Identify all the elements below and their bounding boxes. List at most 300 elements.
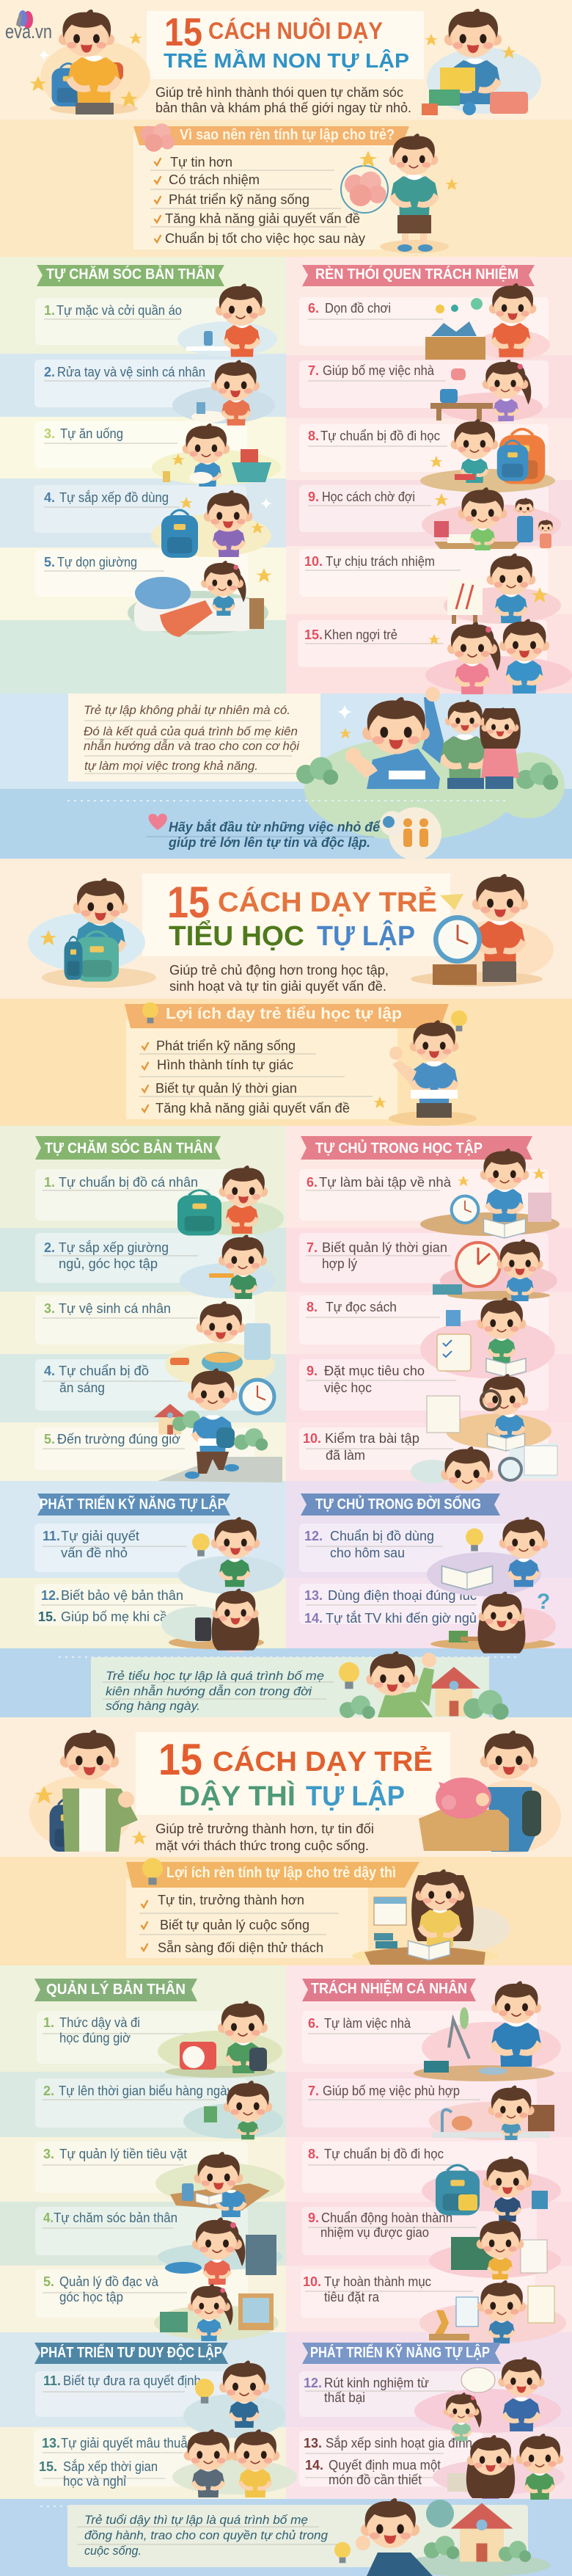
title card bbox=[147, 11, 424, 79]
item 13 and 14: 13. bbox=[304, 1588, 323, 1603]
kid: walking bbox=[154, 1369, 282, 1482]
item 11: vấn đề nhỏ bbox=[61, 1546, 128, 1560]
ribbon: self-care: TỰ CHĂM SÓC BẢN THÂN bbox=[46, 265, 215, 283]
title line 1: CÁCH DẠY TRẺ bbox=[213, 1745, 433, 1778]
item 10: đã làm bbox=[326, 1448, 365, 1463]
title card bbox=[142, 873, 450, 956]
italic message: Trẻ tuổi dậy thì tự lập là quá trình bố mẹ bbox=[84, 2513, 308, 2527]
kid: school bag bbox=[177, 1165, 284, 1236]
kid: packing backpack bbox=[422, 2156, 561, 2222]
kid: eating bbox=[152, 423, 281, 487]
panel: message card 1 bbox=[68, 687, 565, 840]
item 10: tiêu đặt ra bbox=[324, 2290, 380, 2304]
title line 1: 15 bbox=[167, 878, 210, 927]
item 2: Tự lên thời gian biểu hàng ngày bbox=[59, 2084, 233, 2098]
item 3: 3. bbox=[44, 1301, 55, 1316]
ribbon: PHÁT TRIỂN KỸ NĂNG TỰ LẬP bbox=[310, 2343, 490, 2361]
item 13 and 14: 14. bbox=[304, 1611, 323, 1626]
item 8 bbox=[302, 2142, 537, 2193]
callout text bbox=[147, 819, 381, 850]
panel: benefits primary bbox=[125, 1003, 477, 1126]
ribbon bbox=[302, 2343, 501, 2364]
ribbon heading: Vì sao nên rèn tính tự lập cho trẻ? bbox=[180, 127, 395, 143]
item 3: Tự ăn uống bbox=[60, 426, 123, 441]
kid: thinking bbox=[183, 2361, 286, 2438]
panel: life skills primary bbox=[34, 1493, 284, 1652]
item 9: 9. bbox=[308, 2211, 319, 2225]
item 1 bbox=[35, 1169, 255, 1220]
title line 2: TỰ LẬP bbox=[317, 920, 415, 952]
kid: schedule bbox=[183, 2081, 283, 2139]
item 13 and 15: học và nghỉ bbox=[63, 2474, 126, 2489]
item 13 and 14: Quyết định mua một bbox=[329, 2458, 441, 2473]
item 7 bbox=[299, 1233, 549, 1283]
item 6 bbox=[299, 1169, 549, 1220]
item 12 and 15: 12. bbox=[41, 1588, 59, 1603]
kid: toy box bbox=[425, 283, 550, 360]
icon: heart bbox=[148, 814, 167, 830]
item 5: Tự dọn giường bbox=[57, 555, 137, 570]
kid: blackboard bbox=[429, 2219, 561, 2280]
item 3: Tự vệ sinh cá nhân bbox=[59, 1301, 171, 1316]
kid: backpack bbox=[28, 878, 156, 988]
item 4: 4.Tự chăm sóc bản thân bbox=[43, 2211, 177, 2225]
ribbon bbox=[34, 2343, 228, 2364]
item 9: 9. bbox=[308, 490, 319, 504]
kid: teen with backpack bbox=[29, 1730, 147, 1852]
item 8 bbox=[299, 424, 549, 472]
item 6: Dọn đồ chơi bbox=[325, 301, 391, 316]
panel: why build independence bbox=[133, 123, 458, 253]
subtitle bbox=[155, 1822, 374, 1853]
subtitle: mặt với thách thức trong cuộc sống. bbox=[155, 1838, 369, 1853]
kid: praising bbox=[425, 619, 572, 694]
item 7: Biết quản lý thời gian bbox=[322, 1240, 447, 1255]
kid with house bbox=[339, 1651, 509, 1720]
item 12: 12. bbox=[304, 1529, 323, 1543]
item 7 bbox=[302, 2078, 537, 2128]
panel: life skills teen bbox=[299, 2343, 565, 2500]
callout text: Hãy bắt đầu từ những việc nhỏ để bbox=[169, 819, 381, 834]
item 4: 4. bbox=[44, 490, 55, 505]
checklist: Chuẩn bị tốt cho việc học sau này bbox=[165, 231, 365, 246]
item 3: 3. bbox=[44, 426, 55, 441]
item 15 bbox=[298, 620, 547, 667]
item 1: 1. bbox=[44, 1175, 55, 1190]
item 12: 12. bbox=[304, 2376, 322, 2390]
panel: benefits teen bbox=[126, 1858, 510, 1965]
kid: magnifier bbox=[427, 1374, 551, 1451]
kid: washing bbox=[177, 284, 277, 357]
item 4 bbox=[34, 485, 246, 533]
item 10 bbox=[299, 549, 549, 597]
italic message: nhẫn hướng dẫn và trao cho con cơ hội bbox=[84, 739, 300, 753]
item 4: ăn sáng bbox=[59, 1380, 105, 1395]
item 10 bbox=[301, 2269, 535, 2318]
subtitle bbox=[155, 85, 411, 115]
item 8: Tự chuẩn bị đồ đi học bbox=[324, 2147, 444, 2161]
item 12: Rút kinh nghiệm từ bbox=[324, 2376, 429, 2390]
item 5: góc học tập bbox=[59, 2290, 123, 2304]
item 2: ngủ, góc học tập bbox=[59, 1256, 158, 1271]
kid: school bag bbox=[420, 419, 555, 492]
item 12 bbox=[299, 1524, 512, 1572]
italic message: cuộc sống. bbox=[84, 2544, 142, 2558]
item 12: cho hôm sau bbox=[330, 1546, 405, 1560]
item 2 bbox=[34, 360, 247, 407]
item 7 bbox=[299, 360, 549, 408]
item 1 bbox=[37, 2011, 249, 2064]
item 5 bbox=[34, 1427, 254, 1470]
item 11 bbox=[35, 2371, 248, 2417]
item 2: 2. bbox=[44, 365, 55, 379]
ribbon: TỰ CHỦ TRONG ĐỜI SỐNG bbox=[315, 1495, 481, 1513]
title line 2: DẬY THÌ bbox=[179, 1780, 296, 1812]
item 10: Tự hoàn thành mục bbox=[324, 2274, 431, 2289]
item 8: Tự đọc sách bbox=[326, 1300, 397, 1314]
item 12 and 15 bbox=[34, 1584, 225, 1626]
kid: packing backpack bbox=[151, 490, 272, 558]
kids: two talking bbox=[172, 2429, 297, 2497]
item 8 bbox=[299, 1295, 549, 1345]
item 8: 8. bbox=[307, 1300, 318, 1314]
panel: study autonomy bbox=[299, 1136, 560, 1491]
title line 1: CÁCH DẠY TRẺ bbox=[218, 886, 437, 918]
item 6: 6. bbox=[307, 1175, 318, 1190]
kid with house and speech bubble bbox=[334, 2498, 550, 2576]
item 10: 10. bbox=[304, 554, 323, 569]
title line 2: TIỂU HỌC bbox=[169, 919, 304, 952]
item 6: 6. bbox=[308, 2016, 319, 2031]
subtitle: bản thân và khám phá thế giới ngay từ nhỏ. bbox=[155, 101, 411, 115]
kid: reading bbox=[420, 1298, 555, 1378]
kid: girl with question mark: ? bbox=[537, 1590, 550, 1614]
kids: family talk bbox=[433, 2434, 565, 2500]
title line 1: 15 bbox=[164, 10, 202, 54]
item 10: 10. bbox=[303, 2274, 321, 2289]
ribbon bbox=[35, 1136, 221, 1160]
checklist: Tự tin hơn bbox=[170, 155, 232, 170]
item 13 and 15: Tự giải quyết mâu thuẫn bbox=[61, 2435, 194, 2451]
kid: fist raised bbox=[373, 1011, 477, 1126]
kid: girl with question mark bbox=[430, 1590, 556, 1653]
panel: independent thinking bbox=[34, 2343, 297, 2497]
subtitle: Giúp trẻ hình thành thói quen tự chăm sóc bbox=[155, 85, 403, 100]
kid: big clock bbox=[433, 1240, 557, 1301]
italic message: sống hàng ngày. bbox=[106, 1699, 200, 1713]
item 13 and 14: Sắp xếp sinh hoạt gia đình bbox=[326, 2435, 472, 2451]
kid: girl with frame bbox=[154, 2284, 279, 2341]
item 7: 7. bbox=[308, 2084, 319, 2098]
kid: making bed bbox=[128, 561, 272, 637]
kid: toothbrush bbox=[180, 1234, 275, 1299]
item 12: Chuẩn bị đồ dùng bbox=[330, 1529, 434, 1543]
kid: checking homework bbox=[411, 1442, 557, 1491]
item 1: Thức dậy và đi bbox=[59, 2015, 140, 2030]
kid: boy tidying toys bbox=[422, 9, 541, 115]
item 9: việc học bbox=[324, 1380, 372, 1395]
item 1: học đúng giờ bbox=[59, 2031, 131, 2045]
ribbon: TỰ CHĂM SÓC BẢN THÂN bbox=[45, 1139, 213, 1157]
item 10: 10. bbox=[303, 1431, 321, 1446]
item 15: Khen ngợi trẻ bbox=[324, 627, 397, 642]
checklist: Tăng khả năng giải quyết vấn đề bbox=[165, 211, 360, 226]
ribbon heading: Lợi ích rèn tính tự lập cho trẻ dậy thì bbox=[166, 1865, 396, 1881]
checklist: Hình thành tính tự giác bbox=[157, 1058, 293, 1072]
item 4: 4. bbox=[44, 1364, 55, 1378]
ribbon bbox=[302, 1979, 476, 2001]
item 7: 7. bbox=[308, 363, 319, 378]
panel: self-care (preschool) bbox=[34, 265, 281, 637]
title line 1: 15 bbox=[158, 1735, 202, 1784]
title line 2 bbox=[169, 919, 415, 952]
item 5: 5. bbox=[43, 2274, 54, 2289]
checklist: Biết tự quản lý thời gian bbox=[155, 1081, 297, 1096]
checklist: Phát triển kỹ năng sống bbox=[156, 1038, 296, 1053]
item 13 and 15: 13. bbox=[42, 2436, 60, 2451]
item 12 and 15: Biết bảo vệ bản thân bbox=[61, 1588, 183, 1603]
item 5: Quản lý đồ đạc và bbox=[59, 2274, 159, 2289]
item 7: 7. bbox=[307, 1240, 318, 1255]
item 13 and 15: Sắp xếp thời gian bbox=[63, 2459, 158, 2474]
item 11: Tự giải quyết bbox=[61, 1529, 139, 1543]
kids: speech bubble conversation bbox=[414, 2357, 561, 2441]
item 9: nhiệm vụ được giao bbox=[320, 2225, 429, 2240]
item 6: Tự làm việc nhà bbox=[324, 2016, 411, 2031]
item 7: Giúp bố mẹ việc nhà bbox=[323, 363, 435, 378]
item 9: Đặt mục tiêu cho bbox=[324, 1364, 425, 1378]
checklist: Biết tự quản lý cuộc sống bbox=[160, 1918, 309, 1932]
item 12 and 15: 15. bbox=[38, 1609, 56, 1624]
section 1 header bbox=[29, 9, 541, 115]
ribbon bbox=[34, 1979, 197, 2001]
checklist: Phát triển kỹ năng sống bbox=[169, 192, 309, 207]
ribbon: QUẢN LÝ BẢN THÂN bbox=[46, 1980, 186, 1998]
logo: eva.vn bbox=[5, 10, 52, 43]
checklist bbox=[139, 1038, 373, 1116]
item 5 bbox=[35, 550, 248, 597]
item 7: hợp lý bbox=[322, 1256, 357, 1271]
ribbon: responsibility: RÈN THÓI QUEN TRÁCH NHIỆM bbox=[315, 265, 518, 283]
item 9 bbox=[299, 485, 549, 532]
italic message: Trẻ tiểu học tự lập là quá trình bố mẹ bbox=[106, 1669, 324, 1683]
item 12 and 15: Giúp bố mẹ khi cần bbox=[61, 1609, 175, 1624]
ribbon bbox=[301, 1493, 500, 1516]
item 13 and 14: món đồ cần thiết bbox=[329, 2473, 422, 2487]
item 6: 6. bbox=[308, 301, 319, 316]
item 3: 3. bbox=[43, 2147, 54, 2161]
item 12: thất bại bbox=[324, 2390, 365, 2405]
title card bbox=[136, 1732, 450, 1815]
item 1: 1. bbox=[44, 303, 55, 318]
panel: self management (teen) bbox=[34, 1979, 285, 2341]
item 3: Tự quản lý tiền tiêu vặt bbox=[59, 2147, 187, 2161]
italic message: kiên nhẫn hướng dẫn con trong đời bbox=[106, 1684, 312, 1698]
title line 1 bbox=[164, 10, 383, 54]
kid: alarm clock bbox=[158, 2001, 282, 2078]
ribbon: PHÁT TRIỂN KỸ NĂNG TỰ LẬP bbox=[40, 1495, 226, 1513]
ribbon heading: Lợi ích dạy trẻ tiểu học tự lập bbox=[166, 1005, 402, 1022]
ribbon bbox=[301, 1136, 532, 1160]
item 1: Tự mặc và cởi quần áo bbox=[56, 303, 182, 318]
title line 2: TỰ LẬP bbox=[306, 1780, 405, 1812]
kid: clock bbox=[411, 874, 554, 986]
section 3 header bbox=[29, 1730, 561, 1853]
kid: girl with books bbox=[158, 2218, 282, 2285]
item 8: Tự chuẩn bị đồ đi học bbox=[320, 429, 440, 443]
kid: boy with backpack bbox=[29, 10, 150, 114]
item 6: Tự làm bài tập về nhà bbox=[319, 1175, 452, 1190]
item 13 and 14 bbox=[299, 1584, 483, 1626]
item 11: 11. bbox=[43, 1529, 60, 1543]
item 4 bbox=[35, 1359, 255, 1411]
kid: painting bbox=[444, 553, 561, 624]
item 3 bbox=[35, 1295, 255, 1345]
item 4 bbox=[35, 2207, 248, 2255]
kid: girl studying bbox=[352, 1869, 510, 1965]
item 6 bbox=[302, 2011, 537, 2064]
item 1 bbox=[35, 298, 248, 345]
checklist: Tự tin, trưởng thành hơn bbox=[158, 1893, 304, 1907]
ribbon bbox=[37, 1493, 230, 1516]
item 2: Tự sắp xếp giường bbox=[59, 1240, 169, 1255]
logo: eva.vn: eva.vn bbox=[5, 21, 52, 43]
kid: helping parents bbox=[430, 360, 543, 422]
item 13 and 14 bbox=[299, 2431, 483, 2487]
panel: message card 2 bbox=[59, 1651, 516, 1720]
icon: children holding hands bbox=[380, 807, 441, 860]
item 13 and 15 bbox=[34, 2429, 224, 2489]
panel: responsibility (preschool) bbox=[298, 265, 572, 694]
item 11: Biết tự đưa ra quyết định bbox=[63, 2373, 201, 2388]
callout: start small bbox=[67, 801, 507, 860]
item 2: Rửa tay và vệ sinh cá nhân bbox=[57, 365, 205, 379]
kid: papers and hourglass bbox=[419, 2280, 566, 2343]
item 1: Tự chuẩn bị đồ cá nhân bbox=[59, 1175, 198, 1190]
panel: message card 3 bbox=[40, 2498, 550, 2576]
item 4: Tự sắp xếp đồ dùng bbox=[59, 490, 169, 505]
checklist: Tăng khả năng giải quyết vấn đề bbox=[155, 1101, 350, 1116]
item 4: Tự chuẩn bị đồ bbox=[59, 1364, 149, 1378]
italic message bbox=[77, 2513, 339, 2558]
kid: homework bbox=[420, 1149, 560, 1238]
item 13 and 14: 13. bbox=[304, 2436, 322, 2451]
kid: breakfast bbox=[165, 1301, 275, 1387]
kid: lamp and table bbox=[414, 1982, 561, 2081]
item 5: 5. bbox=[44, 1432, 55, 1447]
checklist bbox=[150, 155, 365, 246]
kid: kitchen bbox=[429, 2086, 554, 2140]
ribbon: PHÁT TRIỂN TƯ DUY ĐỘC LẬP bbox=[40, 2343, 222, 2361]
italic message: tự làm mọi việc trong khả năng. bbox=[84, 759, 258, 773]
kid: bulb idea bbox=[178, 1517, 284, 1594]
item 9: 9. bbox=[307, 1364, 318, 1378]
kid: waiting bbox=[422, 487, 561, 550]
item 15: 15. bbox=[304, 627, 323, 642]
item 11: 11. bbox=[43, 2373, 61, 2388]
item 10 bbox=[299, 1427, 549, 1470]
title line 1 bbox=[158, 1735, 433, 1784]
panel: daily life primary bbox=[299, 1493, 556, 1653]
icon: bulb bbox=[142, 1003, 158, 1023]
kid: phone bbox=[161, 1589, 264, 1652]
item 2: 2. bbox=[44, 1240, 55, 1255]
subtitle: sinh hoạt và tự tin giải quyết vấn đề. bbox=[169, 979, 386, 994]
item 2: 2. bbox=[43, 2084, 54, 2098]
italic message: Trẻ tự lập không phải tự nhiên mà có. bbox=[84, 703, 290, 717]
subtitle: Giúp trẻ trưởng thành hơn, tự tin đối bbox=[155, 1822, 374, 1836]
italic message bbox=[84, 703, 300, 774]
checklist: Sẵn sàng đối diện thử thách bbox=[158, 1940, 323, 1955]
kid: hand wash bbox=[172, 360, 275, 426]
item 10: Tự chịu trách nhiệm bbox=[326, 554, 435, 569]
callout text: giúp trẻ lớn lên tự tin và độc lập. bbox=[168, 835, 370, 850]
item 3 bbox=[34, 421, 247, 468]
subtitle bbox=[169, 963, 389, 994]
item 8: 8. bbox=[308, 429, 319, 443]
item 10: Kiểm tra bài tập bbox=[325, 1431, 419, 1446]
kid: book bbox=[427, 1517, 548, 1596]
kid: boy with brain diagram bbox=[341, 134, 458, 253]
title line 1 bbox=[167, 878, 437, 927]
kid with parents bbox=[296, 687, 565, 840]
item 9: Chuẩn động hoàn thành bbox=[321, 2211, 452, 2225]
panel: self-care (primary) bbox=[34, 1136, 284, 1482]
icon: bulb bbox=[142, 1858, 163, 1885]
ribbon: TỰ CHỦ TRONG HỌC TẬP bbox=[315, 1139, 483, 1157]
item 8: 8. bbox=[308, 2147, 319, 2161]
ribbon heading bbox=[133, 126, 409, 145]
section 2 header bbox=[28, 873, 554, 994]
italic message bbox=[103, 1669, 334, 1713]
item 3 bbox=[35, 2142, 248, 2193]
item 6 bbox=[299, 297, 549, 346]
item 13 and 14: Tự tắt TV khi đến giờ ngủ bbox=[326, 1610, 477, 1626]
item 7: Giúp bố mẹ việc phù hợp bbox=[323, 2084, 460, 2098]
kid: piggy bank bbox=[419, 1731, 561, 1853]
panel: personal responsibility (teen) bbox=[301, 1979, 566, 2343]
icon: brain bbox=[141, 123, 175, 152]
ribbon heading bbox=[126, 1862, 419, 1888]
kid: pocket money box bbox=[155, 2152, 285, 2217]
title line 2 bbox=[179, 1780, 405, 1812]
checklist: Có trách nhiệm bbox=[169, 172, 260, 187]
checklist bbox=[139, 1893, 339, 1955]
ribbon heading bbox=[125, 1004, 449, 1028]
item 13 and 15: 15. bbox=[39, 2459, 57, 2474]
item 1: 1. bbox=[43, 2015, 54, 2030]
title line 2: TRẺ MẦM NON TỰ LẬP bbox=[164, 48, 409, 72]
item 2 bbox=[35, 1233, 255, 1283]
subtitle: Giúp trẻ chủ động hơn trong học tập, bbox=[169, 963, 389, 978]
ribbon: self-care bbox=[37, 265, 224, 286]
ribbon: TRÁCH NHIỆM CÁ NHÂN bbox=[311, 1979, 467, 1997]
italic message: Đó là kết quả của quá trình bố mẹ kiên bbox=[84, 724, 298, 738]
item 9 bbox=[299, 1359, 549, 1411]
italic message: đồng hành, trao cho con quyền tự chủ trong bbox=[84, 2528, 329, 2542]
item 5: 5. bbox=[44, 555, 55, 570]
item 13 and 14: 14. bbox=[305, 2458, 323, 2473]
item 12 bbox=[299, 2371, 512, 2417]
item 13 and 14: Dùng điện thoại đúng lúc bbox=[328, 1588, 477, 1603]
item 11 bbox=[34, 1524, 247, 1572]
title line 1: CÁCH NUÔI DẠY bbox=[208, 18, 383, 44]
item 9 bbox=[302, 2207, 537, 2255]
item 9: Học cách chờ đợi bbox=[322, 490, 415, 504]
item 2 bbox=[35, 2078, 248, 2128]
item 5: Đến trường đúng giờ bbox=[57, 1432, 180, 1447]
item 5 bbox=[35, 2269, 248, 2318]
